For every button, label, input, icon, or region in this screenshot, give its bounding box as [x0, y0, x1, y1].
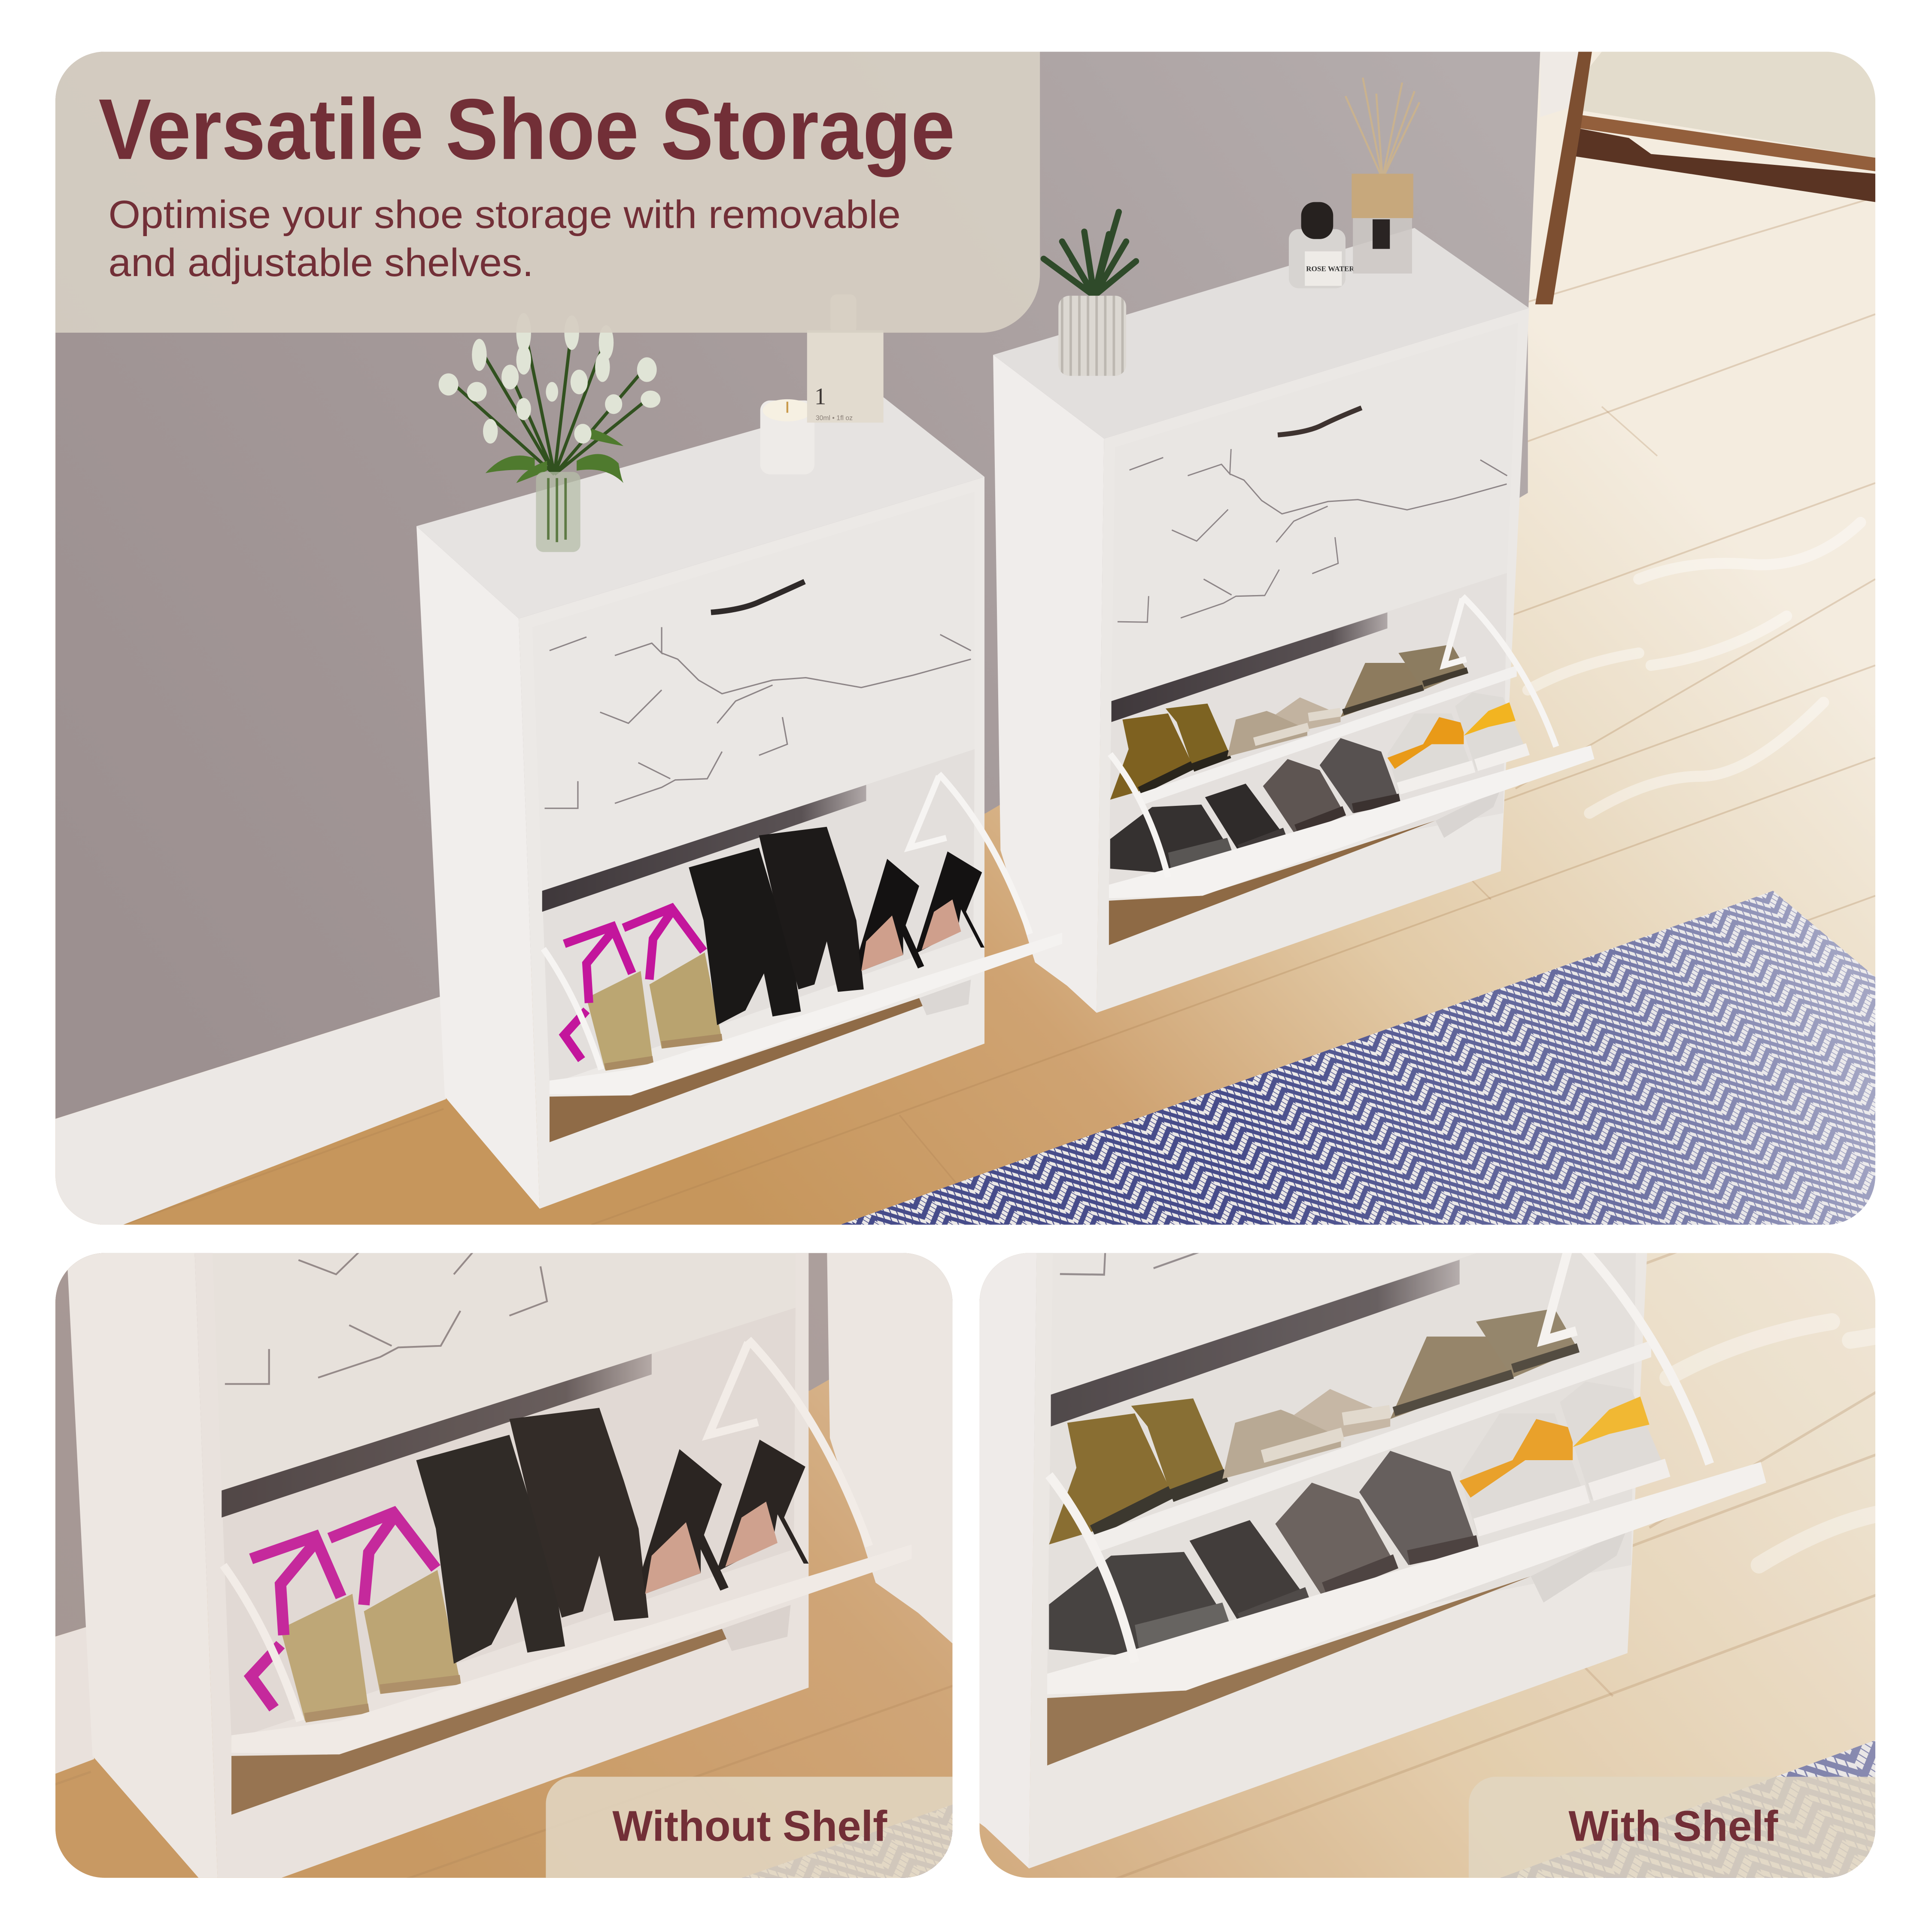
label: without shelf: Without Shelf — [612, 1802, 887, 1850]
cabinet 1 base recess — [919, 980, 971, 1015]
cabinet 1 handle — [711, 582, 805, 612]
flower vase — [439, 313, 660, 552]
lotion bottle — [807, 295, 884, 422]
cabinet 1 dark gap — [542, 785, 866, 912]
cabinet 2 floor opening — [1109, 820, 1435, 945]
label: with shelf: With Shelf — [1568, 1802, 1778, 1850]
cabinet 2 top surface — [993, 228, 1529, 439]
label: with shelf — [1469, 1777, 1875, 1878]
cabinet 2 lower shoes — [1110, 693, 1528, 874]
cabinet 1 (without shelf) — [416, 394, 1062, 1209]
panel: without shelf — [0, 408, 1932, 1932]
cabinet 2 handle — [1278, 408, 1361, 435]
cabinet 1 flap — [550, 933, 1062, 1095]
subtitle: Optimise your shoe storage with removable — [109, 193, 901, 237]
cabinet 2 flap — [1109, 745, 1595, 898]
cabinet 2 base recess — [1435, 789, 1501, 838]
subtitle: and adjustable shelves. — [109, 241, 534, 285]
cabinet 2 interior — [1109, 573, 1507, 887]
perfume bottle — [1289, 202, 1355, 289]
cabinet 1 top surface — [416, 394, 984, 619]
panel: main room scene — [55, 52, 1875, 1237]
rug — [840, 891, 1875, 1225]
lotion bottle: 30ml • 1fl oz — [816, 415, 853, 422]
reed diffuser — [1346, 78, 1419, 273]
back wall — [55, 52, 1540, 1119]
glass vase — [536, 472, 580, 552]
lotion bottle: 1 — [814, 383, 826, 409]
skirting board — [55, 996, 446, 1225]
title: Versatile Shoe Storage — [99, 81, 955, 177]
subtitle — [109, 193, 901, 285]
panel: with shelf — [0, 407, 1932, 1932]
cabinet 2 side — [993, 355, 1104, 1013]
cabinet 1 marble door — [532, 492, 975, 891]
perfume bottle: ROSE WATER — [1306, 264, 1355, 273]
cabinet 2 upper shoes — [1110, 644, 1467, 800]
cabinet 1 interior — [542, 749, 975, 1084]
cabinet 2 removable shelf — [1140, 665, 1517, 806]
panel: title card — [55, 52, 1040, 333]
label: without shelf — [546, 1777, 952, 1878]
floor — [55, 52, 1875, 1237]
cabinet 2 (with shelf) — [993, 228, 1595, 1013]
black heels — [859, 859, 924, 971]
cabinet 1 front — [519, 477, 984, 1209]
cabinet 2 front — [1097, 308, 1529, 1013]
flower heads — [439, 313, 660, 444]
marble veining, cabinet 1 — [544, 627, 971, 808]
cabinet 2 brackets — [1110, 596, 1556, 877]
potted succulent — [1044, 212, 1136, 376]
wedge sandals — [649, 952, 722, 1048]
candle — [760, 399, 814, 474]
black ankle boots — [689, 848, 801, 1025]
cabinet 2 dark gap — [1112, 612, 1388, 722]
cabinet 1 side — [416, 526, 540, 1209]
cabinet 2 marble door — [1112, 323, 1518, 701]
marble veining, cabinet 2 — [1118, 447, 1508, 627]
cabinet 1 brackets — [544, 774, 1030, 1069]
cabinet 1 shoes — [564, 827, 984, 1069]
cabinet 1 floor opening — [550, 998, 924, 1142]
chair — [1535, 52, 1875, 304]
